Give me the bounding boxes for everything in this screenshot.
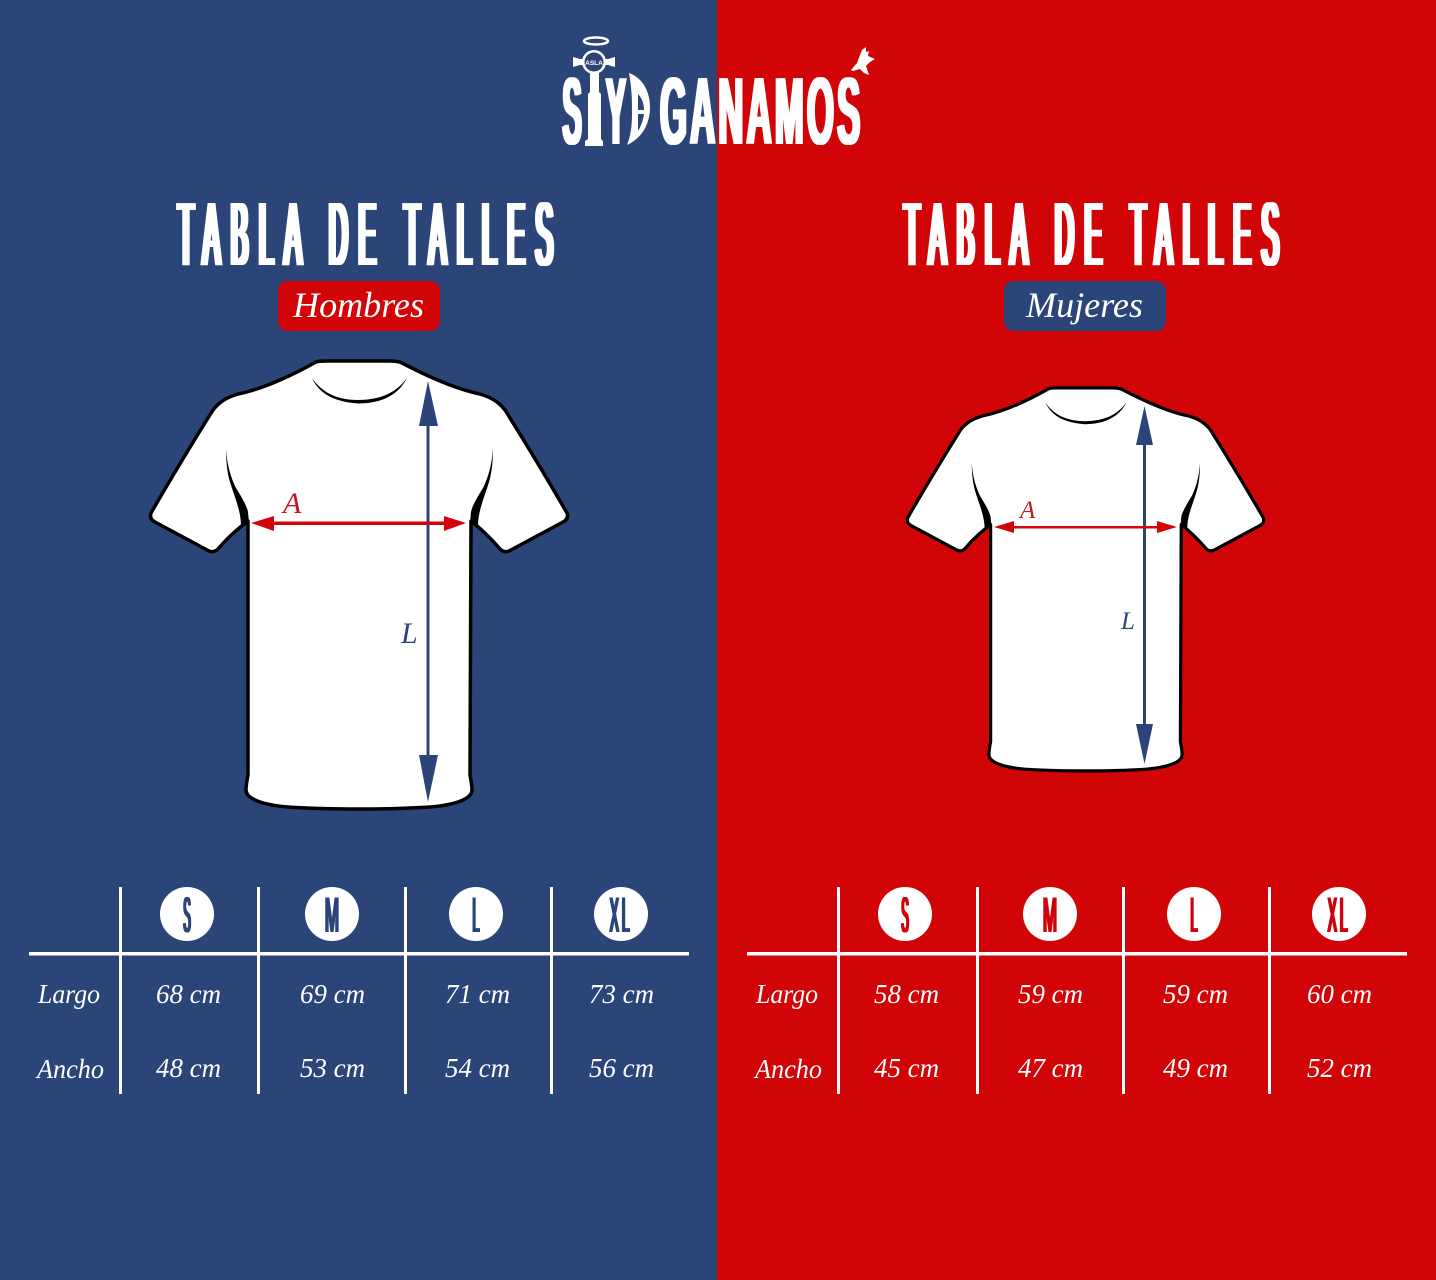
badge: Mujeres bbox=[1004, 281, 1166, 331]
table: men bbox=[29, 886, 689, 1094]
icon: tower with crest and halo: ASLA bbox=[585, 60, 603, 67]
size M: M bbox=[325, 886, 339, 943]
row: Largo: 59 cm bbox=[1163, 979, 1228, 1009]
icon: tower with crest and halo bbox=[573, 38, 615, 146]
arrow: width bbox=[251, 516, 466, 531]
row: Ancho: 47 cm bbox=[1018, 1053, 1083, 1083]
logo word GANAMOS: GANAMOS bbox=[660, 59, 860, 165]
badge: Hombres: Hombres bbox=[292, 285, 424, 325]
size S: S bbox=[901, 886, 909, 943]
row: Ancho: 49 cm bbox=[1163, 1053, 1228, 1083]
row: Largo: 73 cm bbox=[589, 979, 654, 1009]
heading: men title: TABLA DE TALLES bbox=[178, 185, 553, 285]
row: Ancho: Ancho bbox=[753, 1054, 822, 1084]
row: Ancho: 53 cm bbox=[300, 1053, 365, 1083]
logo: Si y ganamos bbox=[562, 38, 875, 166]
shirt outline and details bbox=[907, 388, 1264, 771]
size M bbox=[1023, 886, 1077, 943]
logo letter Y: Y bbox=[606, 59, 626, 166]
size XL: XL bbox=[610, 887, 632, 943]
row: Largo: 71 cm bbox=[445, 979, 510, 1009]
row: Largo: 68 cm bbox=[156, 979, 221, 1009]
logo stylised A bbox=[627, 73, 650, 145]
row: Ancho: 45 cm bbox=[874, 1053, 939, 1083]
grid lines bbox=[747, 887, 1407, 1094]
size M bbox=[305, 886, 359, 943]
arrow: length bbox=[1136, 406, 1153, 764]
size S bbox=[160, 886, 214, 943]
shirt outline bbox=[150, 361, 568, 809]
size M: M bbox=[1043, 886, 1057, 943]
arrow: length bbox=[419, 381, 438, 802]
heading: women title: TABLA DE TALLES bbox=[904, 185, 1279, 285]
logo letter S: S bbox=[562, 59, 582, 166]
size S: S bbox=[183, 886, 191, 943]
size XL: XL bbox=[1328, 887, 1350, 943]
row: Largo: 58 cm bbox=[874, 979, 939, 1009]
panel: blue background bbox=[0, 0, 717, 1280]
row: Ancho: Ancho bbox=[35, 1054, 104, 1084]
label A: A bbox=[1018, 497, 1036, 524]
t-shirt diagram: men bbox=[150, 361, 568, 809]
row: Ancho bbox=[753, 1053, 1372, 1084]
row: Largo: Largo bbox=[755, 979, 818, 1009]
label L: L bbox=[400, 617, 418, 650]
arrow: width bbox=[994, 521, 1177, 533]
row: Ancho: 54 cm bbox=[445, 1053, 510, 1083]
panel: red background bbox=[717, 0, 1436, 1280]
collar and armholes bbox=[226, 378, 493, 526]
grid lines bbox=[29, 887, 689, 1094]
row: Largo: 59 cm bbox=[1018, 979, 1083, 1009]
size L bbox=[449, 887, 503, 943]
row: Largo bbox=[755, 979, 1372, 1009]
size XL bbox=[1312, 887, 1366, 943]
size XL bbox=[594, 887, 648, 943]
row: Largo: 60 cm bbox=[1307, 979, 1372, 1009]
size L: L bbox=[1191, 887, 1197, 943]
size L: L bbox=[473, 887, 479, 943]
row: Ancho bbox=[35, 1053, 654, 1084]
row: Ancho: 48 cm bbox=[156, 1053, 221, 1083]
row: Ancho: 56 cm bbox=[589, 1053, 654, 1083]
label L: L bbox=[1120, 608, 1135, 635]
row: Largo bbox=[37, 979, 654, 1009]
size S bbox=[878, 886, 932, 943]
badge: Mujeres: Mujeres bbox=[1025, 285, 1143, 325]
row: Largo: Largo bbox=[37, 979, 100, 1009]
size L bbox=[1167, 887, 1221, 943]
row: Largo: 69 cm bbox=[300, 979, 365, 1009]
badge: Hombres bbox=[278, 281, 440, 331]
row: Ancho: 52 cm bbox=[1307, 1053, 1372, 1083]
table: women bbox=[747, 886, 1407, 1094]
label A: A bbox=[281, 487, 302, 520]
icon: dove bbox=[851, 47, 875, 75]
t-shirt diagram: women bbox=[907, 388, 1264, 771]
